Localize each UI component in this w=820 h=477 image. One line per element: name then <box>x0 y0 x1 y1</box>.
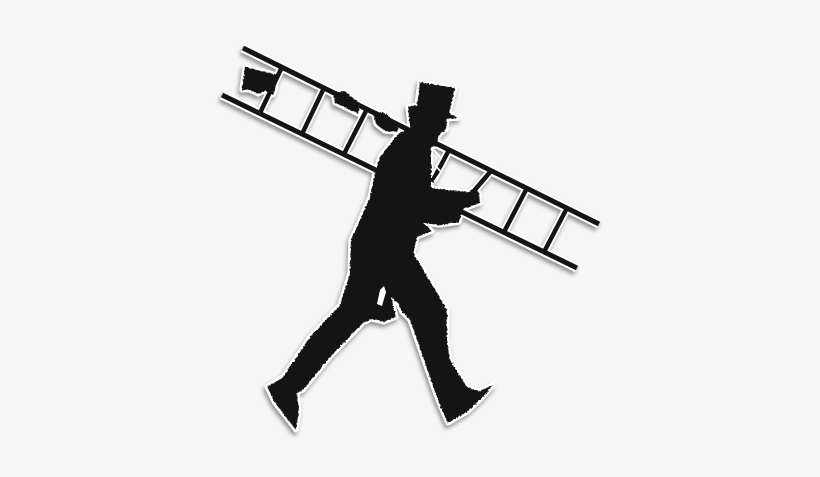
lower ladder rail <box>222 95 577 268</box>
upper ladder rail <box>243 48 599 224</box>
icon: brush rope coil <box>333 91 360 114</box>
ladder <box>222 48 599 268</box>
ladder rungs <box>260 67 567 252</box>
rope detail beside chest <box>434 150 441 182</box>
halo: white outline with drop shadow <box>222 48 599 430</box>
icon: brush rope coil near shoulder <box>373 111 398 132</box>
gap between legs <box>377 286 386 306</box>
icon: brush head <box>242 67 277 95</box>
figure: sweep silhouette with top hat <box>267 82 493 430</box>
chimney brushes <box>242 67 398 132</box>
